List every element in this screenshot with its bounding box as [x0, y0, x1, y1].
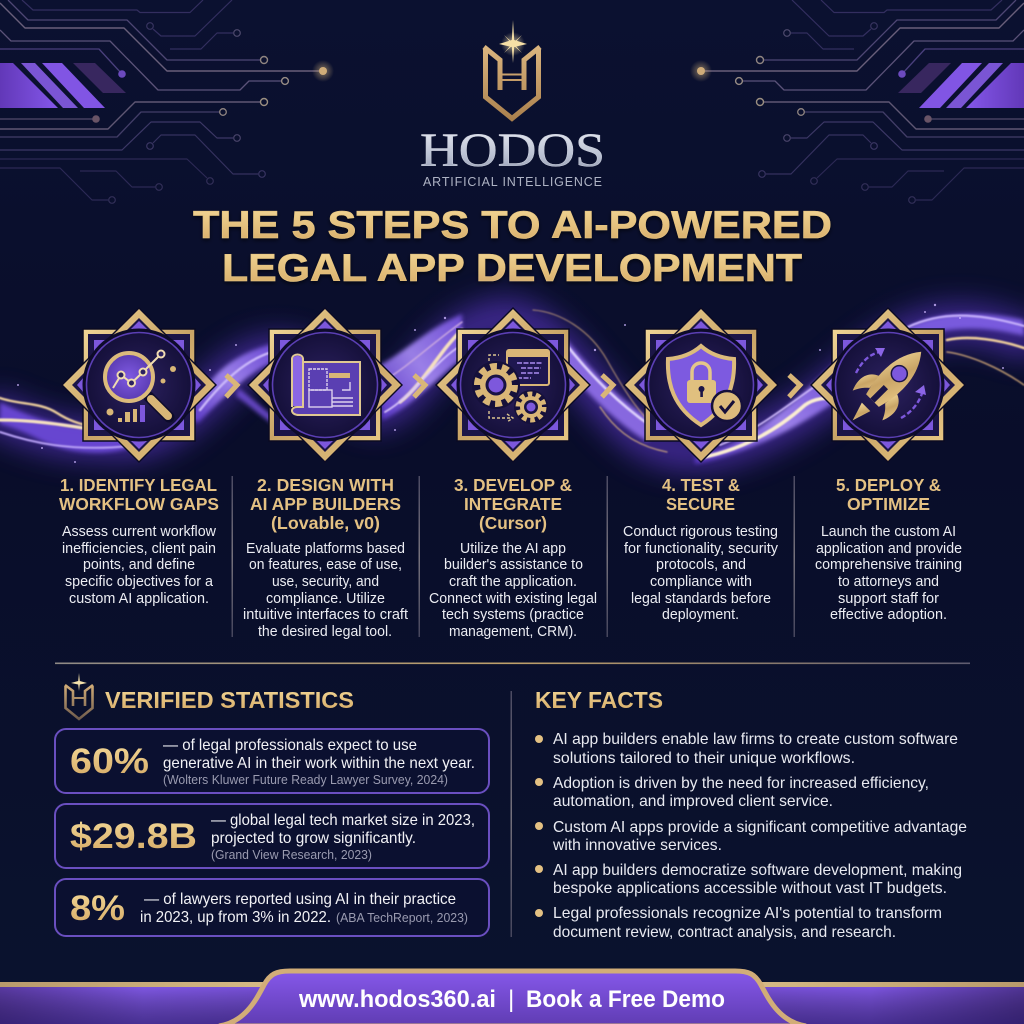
stat card: 8%: in 2023, up from 3% in 2022.: [140, 909, 331, 926]
fact 4: [535, 862, 962, 897]
stat card: $29.8B: — global legal tech market size in 2023,: [211, 812, 475, 829]
stat card: $29.8B: $29.8B: [70, 817, 197, 856]
step 5 text: to attorneys and: [838, 573, 939, 590]
arrow 2: [414, 375, 425, 397]
step 2 text: the desired legal tool.: [258, 623, 392, 640]
step 2 text: use, security, and: [272, 573, 379, 590]
step 2 heading: [250, 475, 401, 533]
icon: rocket: [836, 335, 938, 437]
footer call to action: Book a Free Demo: [526, 986, 725, 1013]
purple stripes: right: [898, 63, 1024, 108]
footer banner: [0, 971, 1024, 1024]
stat card: 60%: (Wolters Kluwer Future Ready Lawyer Survey, 2024): [163, 772, 448, 787]
fact 1: AI app builders enable law firms to create custom software: [553, 731, 958, 748]
fact 5: [535, 905, 942, 941]
flowing light wave: [0, 304, 1024, 464]
step 2 text: compliance. Utilize: [266, 590, 385, 607]
fact 3: [535, 819, 967, 854]
step 3 text: craft the application.: [449, 573, 577, 590]
stat card: $29.8B: [55, 804, 489, 868]
stat card: $29.8B: projected to grow significantly.: [211, 830, 416, 847]
step 4 text: deployment.: [662, 606, 739, 623]
stat card: 60%: 60%: [70, 742, 149, 781]
step 4 text: for functionality, security: [624, 540, 778, 557]
step 5 heading: [836, 475, 941, 514]
step 1 heading: 1. IDENTIFY LEGAL: [60, 475, 217, 495]
step 3 text: Connect with existing legal: [429, 590, 597, 607]
fact 4: AI app builders democratize software development, making: [553, 862, 962, 879]
step 1 text: points, and define: [83, 556, 195, 573]
title: [193, 204, 832, 290]
footer call to action: www.hodos360.ai: [298, 986, 496, 1013]
step 4 heading: SECURE: [666, 494, 735, 514]
step 5 text: application and provide: [816, 540, 962, 557]
step 4 heading: 4. TEST &: [662, 475, 740, 495]
stat card: 8%: 8%: [70, 889, 125, 928]
step 3 heading: (Cursor): [479, 513, 547, 533]
step 1 heading: [59, 475, 219, 514]
step 4 heading: [662, 475, 740, 514]
step 3 badge: gears and code: [435, 307, 591, 463]
step 2 column: [243, 475, 409, 640]
step 1 text: Assess current workflow: [62, 523, 216, 540]
step 4 text: legal standards before: [631, 590, 771, 607]
step 3 text: builder's assistance to: [444, 556, 583, 573]
step 1 text: custom AI application.: [69, 590, 209, 607]
stat card: 60%: [55, 729, 489, 793]
key facts heading: KEY FACTS: [535, 687, 663, 713]
title: THE 5 STEPS TO AI-POWERED: [193, 204, 832, 247]
arrow 4: [789, 375, 800, 397]
fact 3: with innovative services.: [552, 837, 722, 854]
statistics heading: VERIFIED STATISTICS: [105, 687, 354, 713]
step 1 text: [62, 523, 216, 607]
step 3 column: [429, 475, 597, 640]
step 3 text: Utilize the AI app: [460, 540, 566, 557]
circuit decoration: left: [0, 0, 334, 203]
step 5 text: Launch the custom AI: [821, 523, 956, 540]
step 2 text: Evaluate platforms based: [246, 540, 405, 557]
fact 1: solutions tailored to their unique workflows.: [553, 750, 855, 767]
step 3 heading: [454, 475, 572, 533]
arrow 3: [602, 375, 613, 397]
icon: blueprint scroll: [292, 354, 360, 415]
fact 2: [535, 775, 929, 810]
purple stripes: left: [0, 63, 126, 108]
icon: shield lock with check: [668, 346, 742, 425]
logo wordmark: HODOS: [420, 124, 605, 177]
small logo icon: [65, 673, 93, 719]
fact 2: automation, and improved client service.: [553, 793, 833, 810]
step 5 heading: 5. DEPLOY &: [836, 475, 941, 495]
fact 3: Custom AI apps provide a significant competitive advantage: [553, 819, 967, 836]
fact 5: Legal professionals recognize AI's potential to transform: [553, 905, 942, 922]
step 1 text: inefficiencies, client pain: [62, 540, 216, 557]
step 4 badge: shield and lock: [623, 307, 779, 463]
step 5 text: comprehensive training: [815, 556, 962, 573]
stat card: 8%: (ABA TechReport, 2023): [336, 910, 468, 925]
stat card: $29.8B: (Grand View Research, 2023): [211, 847, 372, 862]
stat card: 8%: — of lawyers reported using AI in their practice: [144, 891, 456, 908]
step 3 text: [429, 540, 597, 640]
panel: verified statistics: [55, 673, 489, 936]
stat card: 60%: — of legal professionals expect to use: [163, 737, 417, 754]
step 4 column: [623, 475, 778, 623]
logo emblem: [484, 20, 540, 118]
step 2 text: intuitive interfaces to craft: [243, 606, 409, 623]
panel: key facts: [535, 687, 967, 941]
step 4 text: protocols, and: [656, 556, 746, 573]
icon: magnifying glass with chart: [105, 350, 176, 422]
circuit decoration: right: [690, 0, 1024, 203]
step 2 badge: blueprint: [247, 307, 403, 463]
step 1 heading: WORKFLOW GAPS: [59, 494, 219, 514]
step 4 text: Conduct rigorous testing: [623, 523, 778, 540]
stat card: 8%: [55, 879, 489, 936]
step 3 text: tech systems (practice: [442, 606, 584, 623]
stat card: 60%: generative AI in their work within the next year.: [163, 755, 475, 772]
fact 1: [535, 731, 958, 767]
footer call to action: [298, 986, 725, 1013]
step 5 text: effective adoption.: [830, 606, 947, 623]
step 2 heading: AI APP BUILDERS: [250, 494, 401, 514]
step 1 text: specific objectives for a: [65, 573, 214, 590]
step 2 heading: 2. DESIGN WITH: [257, 475, 394, 495]
arrow 1: [226, 375, 237, 397]
fact 5: document review, contract analysis, and research.: [553, 924, 896, 941]
step 3 heading: INTEGRATE: [464, 494, 562, 514]
step 2 heading: (Lovable, v0): [271, 513, 380, 533]
step 1 badge: analysis magnifier: [61, 307, 217, 463]
step 5 text: [815, 523, 962, 623]
step 5 heading: OPTIMIZE: [847, 494, 930, 514]
footer call to action: |: [508, 986, 514, 1013]
fact 2: Adoption is driven by the need for increased efficiency,: [553, 775, 929, 792]
step 5 text: support staff for: [838, 590, 939, 607]
step 4 text: [623, 523, 778, 623]
logo tagline: ARTIFICIAL INTELLIGENCE: [423, 175, 602, 189]
step 2 text: [243, 540, 409, 640]
title: LEGAL APP DEVELOPMENT: [222, 247, 802, 290]
step 5 column: [815, 475, 962, 623]
step 4 text: compliance with: [650, 573, 752, 590]
step 5 badge: rocket: [810, 307, 966, 463]
step 3 text: management, CRM).: [449, 623, 577, 640]
step 1 column: [59, 475, 219, 607]
fact 4: bespoke applications accessible without vast IT budgets.: [553, 880, 947, 897]
step 3 heading: 3. DEVELOP &: [454, 475, 572, 495]
step 2 text: on features, ease of use,: [249, 556, 402, 573]
icon: gears and window: [472, 350, 549, 424]
